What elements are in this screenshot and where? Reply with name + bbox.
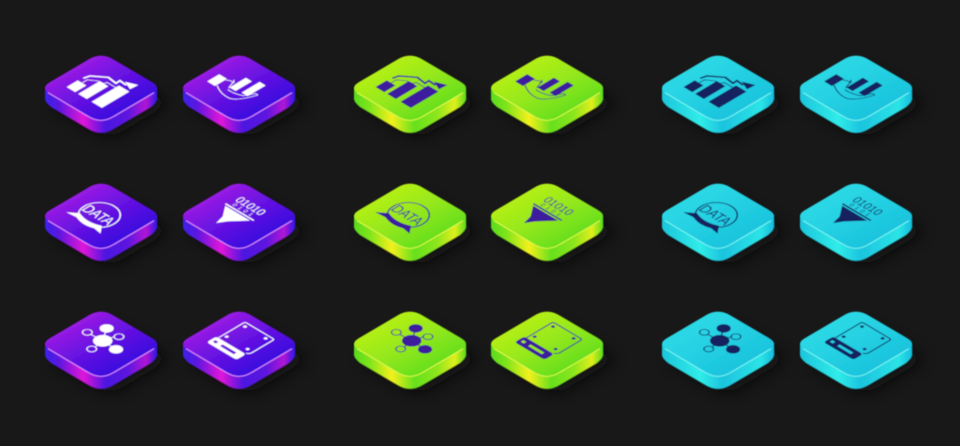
tile: network hub	[45, 312, 166, 391]
tile: network hub	[662, 312, 783, 391]
tile: data funnel	[800, 184, 921, 263]
tile: data funnel: 01010	[540, 195, 578, 217]
tile: data speech bubble	[45, 184, 166, 263]
group: purple icons	[45, 56, 304, 391]
tile: data speech bubble: DATA	[386, 203, 428, 227]
tile: data funnel	[491, 184, 612, 263]
tile: server drive	[800, 312, 921, 391]
group: cyan icons	[662, 56, 921, 391]
all icon tiles	[45, 56, 921, 391]
tile: data funnel: 0101	[847, 203, 872, 218]
tile: data speech bubble	[662, 184, 783, 263]
tile: server drive	[183, 312, 304, 391]
tile: bar chart with trend arrow	[662, 56, 783, 135]
tile: data speech bubble	[354, 184, 475, 263]
tile: network hub	[354, 312, 475, 391]
tile: data funnel: 0101	[538, 203, 563, 218]
tile: data funnel: 0101	[230, 203, 255, 218]
tile: bar chart with trend arrow	[45, 56, 166, 135]
tile: data funnel: 01010	[232, 195, 270, 217]
tile: data funnel: 01010	[849, 195, 887, 217]
tile: hand holding bar chart	[800, 56, 921, 135]
tile: hand holding bar chart	[491, 56, 612, 135]
tile: hand holding bar chart	[183, 56, 304, 135]
group: green icons	[354, 56, 612, 391]
tile: data funnel	[183, 184, 304, 263]
tile: server drive	[491, 312, 612, 391]
tile: data speech bubble: DATA	[694, 203, 736, 227]
tile: data speech bubble: DATA	[77, 203, 119, 227]
tile: bar chart with trend arrow	[354, 56, 475, 135]
